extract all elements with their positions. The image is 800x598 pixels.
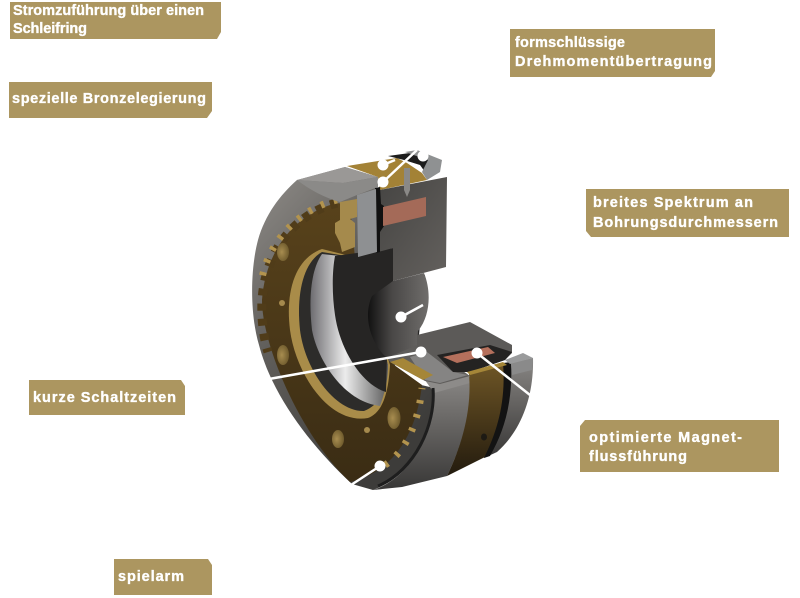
clutch cutaway illustration (252, 150, 533, 490)
gap filler below hub (387, 345, 470, 384)
gear teeth outline (262, 203, 337, 352)
label: spielarm (114, 559, 212, 595)
label: optimierte Magnetflussführung: optimierte Magnet- (589, 430, 742, 446)
outer gray ring (252, 167, 434, 490)
label: formschlüssige Drehmomentübertragung: formschlüssige (515, 35, 625, 51)
top gray rim (297, 167, 378, 183)
label: formschlüssige Drehmomentübertragung: Drehmomentübertragung (515, 54, 712, 70)
label: Stromzuführung über einen Schleifring: Schleifring (13, 21, 87, 37)
lower gray plate (410, 352, 468, 383)
upper cross section block (378, 177, 447, 281)
label: kurze Schaltzeiten: kurze Schaltzeiten (33, 390, 176, 406)
copper coil lower (443, 347, 495, 363)
bearing and hub inside bore (289, 248, 429, 419)
label: spielarm: spielarm (118, 569, 184, 585)
leader line dots (269, 150, 530, 485)
label: breites Spektrum an Bohrungsdurchmessern: breites Spektrum an (593, 195, 753, 211)
label: optimierte Magnetflussführung (580, 420, 779, 472)
gray plate (357, 189, 377, 257)
upper brass ring (347, 158, 427, 190)
label: breites Spektrum an Bohrungsdurchmessern (586, 189, 789, 237)
holes in front face (277, 243, 400, 448)
label: spezielle Bronzelegierung: spezielle Bronzelegierung (12, 91, 206, 107)
lower cross section block (417, 322, 512, 372)
label: breites Spektrum an Bohrungsdurchmessern: Bohrungsdurchmessern (593, 215, 778, 231)
label: Stromzuführung über einen Schleifring: Stromzuführung über einen (13, 3, 204, 19)
brown toothed front face (262, 203, 422, 482)
gold tooth flanks top (262, 200, 337, 278)
lower right plate (505, 353, 533, 364)
brass insert (335, 199, 357, 252)
label: spezielle Bronzelegierung (9, 82, 212, 118)
set screw (404, 168, 410, 197)
right outer bands (373, 358, 533, 490)
gold tooth flanks bottom (385, 388, 422, 465)
lower brass ring (390, 358, 433, 380)
label: Stromzuführung über einen Schleifring (10, 2, 221, 39)
label: kurze Schaltzeiten (29, 380, 185, 415)
label: optimierte Magnetflussführung: flussführung (589, 449, 687, 465)
label: formschlüssige Drehmomentübertragung (510, 29, 715, 77)
copper coil upper (383, 197, 426, 226)
